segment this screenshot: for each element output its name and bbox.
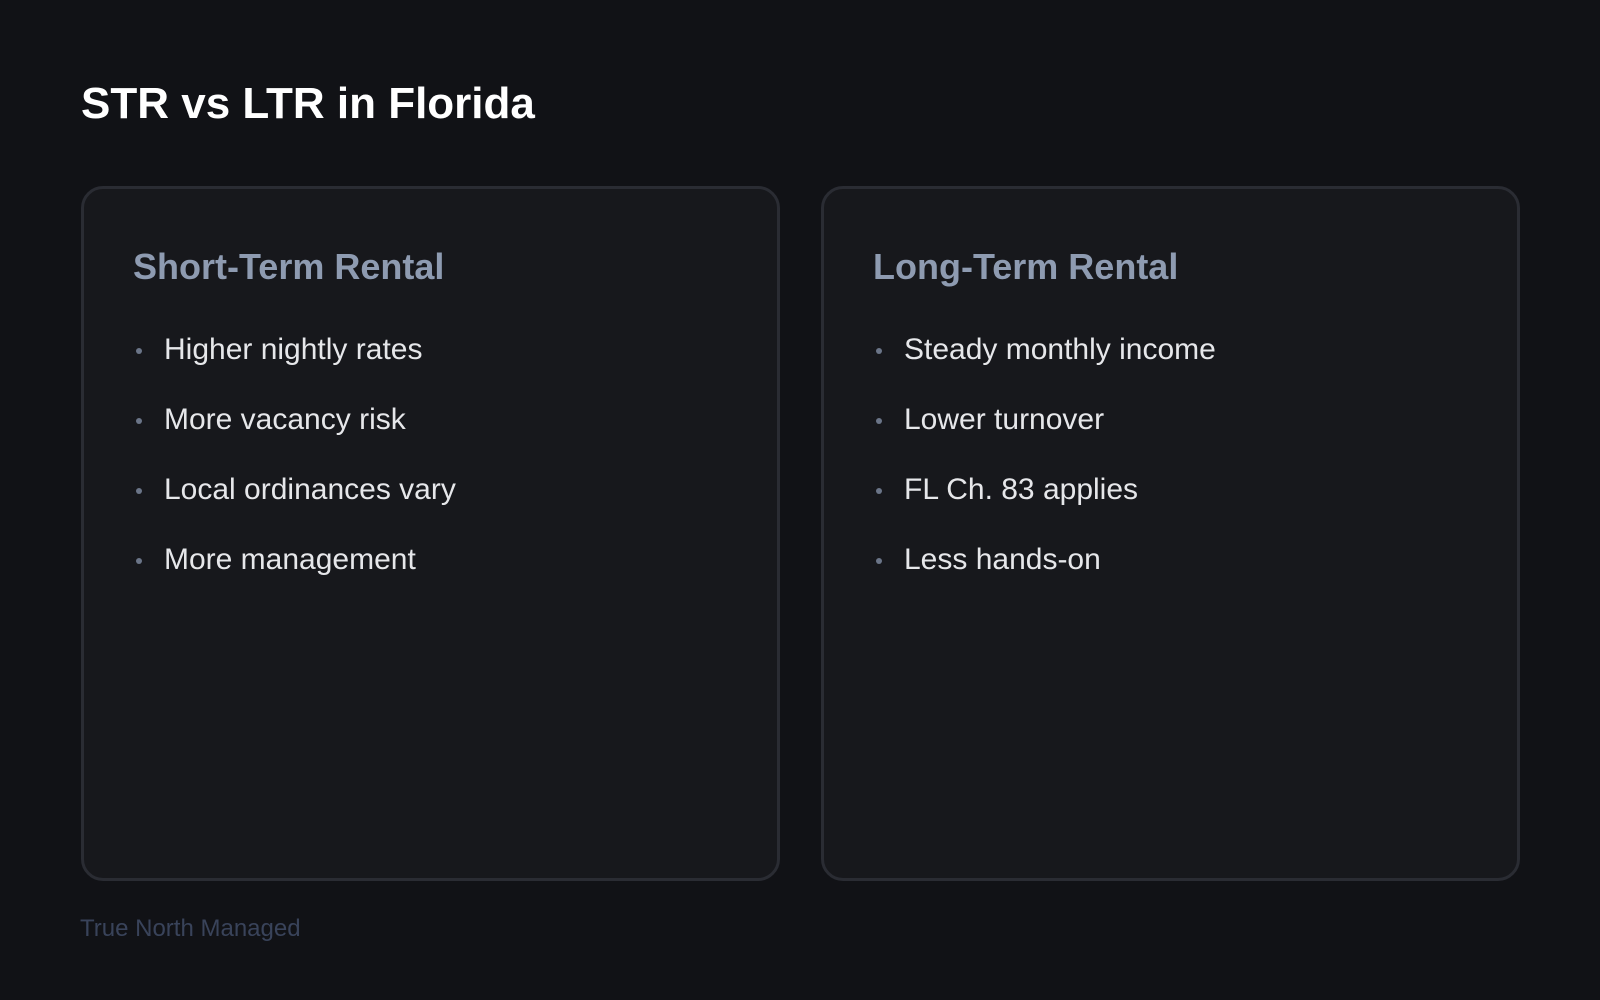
heading: short-term: Short-Term Rental	[133, 246, 444, 287]
bullet 4: Less hands-on	[904, 543, 1101, 576]
bullet 2: More vacancy risk	[164, 403, 406, 436]
bullet 2: Lower turnover	[904, 403, 1104, 436]
footer: True North Managed	[80, 915, 301, 942]
panel: long-term rental	[821, 186, 1520, 881]
heading: long-term: Long-Term Rental	[873, 246, 1178, 287]
bullet 1: Higher nightly rates	[164, 333, 422, 366]
panel: short-term rental	[81, 186, 780, 881]
bullet 1: Steady monthly income	[904, 333, 1216, 366]
bullet 3: FL Ch. 83 applies	[904, 473, 1138, 506]
bullet 3: Local ordinances vary	[164, 473, 456, 506]
title: STR vs LTR in Florida	[81, 79, 535, 128]
bullet 4: More management	[164, 543, 416, 576]
